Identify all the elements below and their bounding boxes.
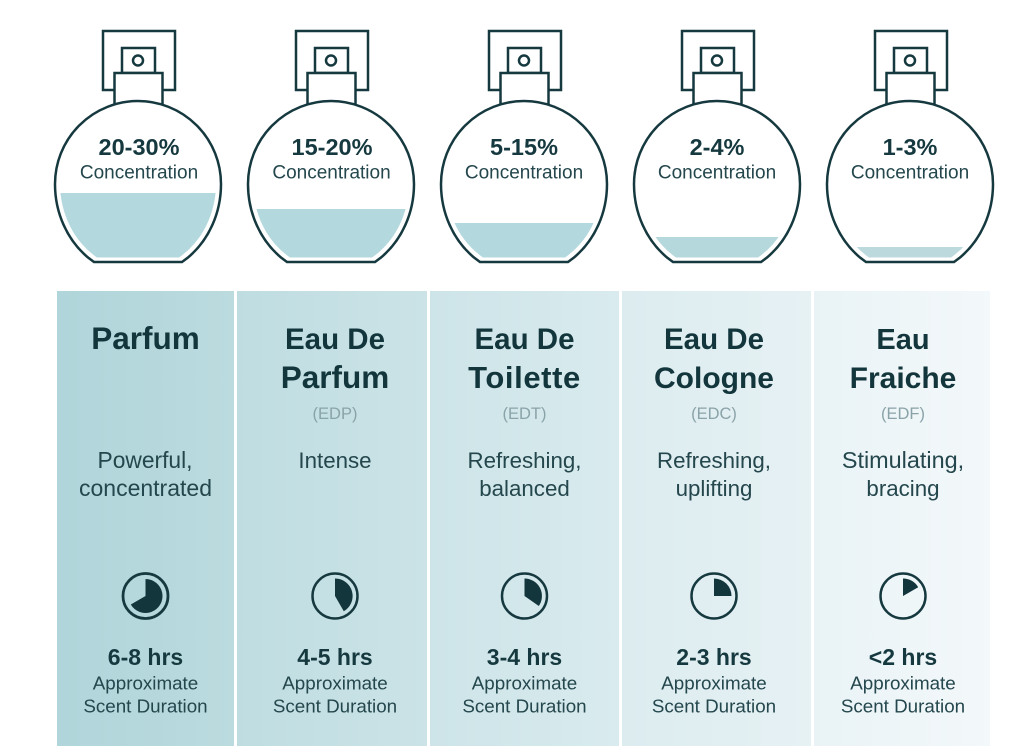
- icon: clock 2-3 hrs: [692, 574, 736, 618]
- heading: Eau De Parfum: Parfum: [281, 359, 389, 395]
- caption: approximate scent duration: Scent Duration: [83, 696, 208, 716]
- bottle: Eau De Parfum 15-20% concentration: [248, 31, 414, 263]
- duration: 4-5 hrs: 4-5 hrs: [297, 644, 373, 670]
- panel: Parfum: [57, 291, 234, 746]
- description: Refreshing, balanced: Refreshing,: [467, 448, 582, 473]
- heading: Eau De Cologne: Cologne: [654, 362, 774, 395]
- caption: approximate scent duration: Scent Duration: [652, 696, 776, 716]
- description: Stimulating, bracing: bracing: [866, 476, 940, 501]
- caption: approximate scent duration: Approximate: [472, 672, 577, 694]
- duration: 6-8 hrs: 6-8 hrs: [108, 644, 183, 670]
- description: Parfum: Powerful,: [97, 447, 193, 473]
- duration: under 2 hrs: <2 hrs: [869, 644, 937, 670]
- heading: Eau Fraiche: Fraiche: [850, 362, 956, 395]
- panel: Eau De Parfum: [237, 291, 427, 746]
- bottle: Eau De Cologne 2-4% concentration: Concentration: [658, 162, 776, 184]
- abbreviation: EDC: (EDC): [691, 405, 737, 423]
- panel: Eau Fraiche: [814, 291, 990, 746]
- heading: Eau De Cologne: Eau De: [664, 323, 764, 356]
- caption: approximate scent duration: Approximate: [850, 672, 956, 694]
- bottle: Eau De Cologne 2-4% concentration: [634, 31, 800, 263]
- bottle: Eau De Toilette 5-15% concentration: [441, 31, 607, 263]
- bottle: Eau De Cologne 2-4% concentration: 2-4%: [690, 134, 745, 160]
- abbreviation: EDF: (EDF): [881, 405, 925, 423]
- icon: clock 6-8 hrs: [123, 574, 168, 618]
- caption: approximate scent duration: Approximate: [282, 672, 388, 694]
- bottle: Eau Fraiche 1-3% concentration: 1-3%: [883, 134, 938, 160]
- bottle: Eau Fraiche 1-3% concentration: Concentration: [851, 162, 969, 184]
- bottle: Parfum 20-30% concentration: Concentration: [80, 162, 198, 184]
- description: Refreshing, uplifting: uplifting: [676, 476, 752, 501]
- heading: Eau De Toilette: Eau De: [474, 323, 575, 356]
- icon: clock 4-5 hrs: [312, 574, 358, 618]
- panel: Eau De Cologne: [622, 291, 811, 746]
- icon: clock under 2 hrs: [880, 574, 926, 618]
- bottle: Eau De Toilette 5-15% concentration: Concentration: [465, 162, 583, 184]
- duration: 2-3 hrs: 2-3 hrs: [676, 644, 752, 670]
- bottle: Eau De Parfum 15-20% concentration: 15-20%: [292, 134, 373, 160]
- caption: approximate scent duration: Approximate: [661, 672, 767, 694]
- bottle: Parfum 20-30% concentration: 20-30%: [98, 134, 180, 160]
- description: Parfum: concentrated: [79, 475, 212, 501]
- heading: Eau De Toilette: Toilette: [468, 360, 581, 395]
- description: Refreshing, balanced: balanced: [479, 476, 570, 501]
- bottle: Eau Fraiche 1-3% concentration: [827, 31, 993, 263]
- icon: clock 3-4 hrs: [502, 574, 547, 618]
- bottle: Eau De Toilette 5-15% concentration: 5-15%: [490, 134, 558, 160]
- bottle: Parfum 20-30% concentration: [55, 31, 221, 263]
- heading: Eau Fraiche: Eau: [876, 324, 930, 356]
- description: Refreshing, uplifting: Refreshing,: [657, 448, 771, 473]
- caption: approximate scent duration: Approximate: [93, 672, 198, 694]
- caption: approximate scent duration: Scent Duration: [273, 696, 397, 716]
- description: Stimulating, bracing: Stimulating,: [842, 447, 964, 473]
- panel: Eau De Toilette: [430, 291, 619, 746]
- bottle: Eau De Parfum 15-20% concentration: Concentration: [272, 162, 391, 184]
- abbreviation: EDP: (EDP): [313, 405, 357, 423]
- duration: 3-4 hrs: 3-4 hrs: [487, 644, 562, 670]
- description: Intense: Intense: [298, 448, 372, 473]
- caption: approximate scent duration: Scent Duration: [462, 696, 587, 716]
- caption: approximate scent duration: Scent Duration: [841, 696, 965, 716]
- heading: Parfum: Parfum: [91, 320, 200, 356]
- abbreviation: EDT: (EDT): [502, 405, 546, 423]
- heading: Eau De Parfum: Eau De: [285, 323, 385, 356]
